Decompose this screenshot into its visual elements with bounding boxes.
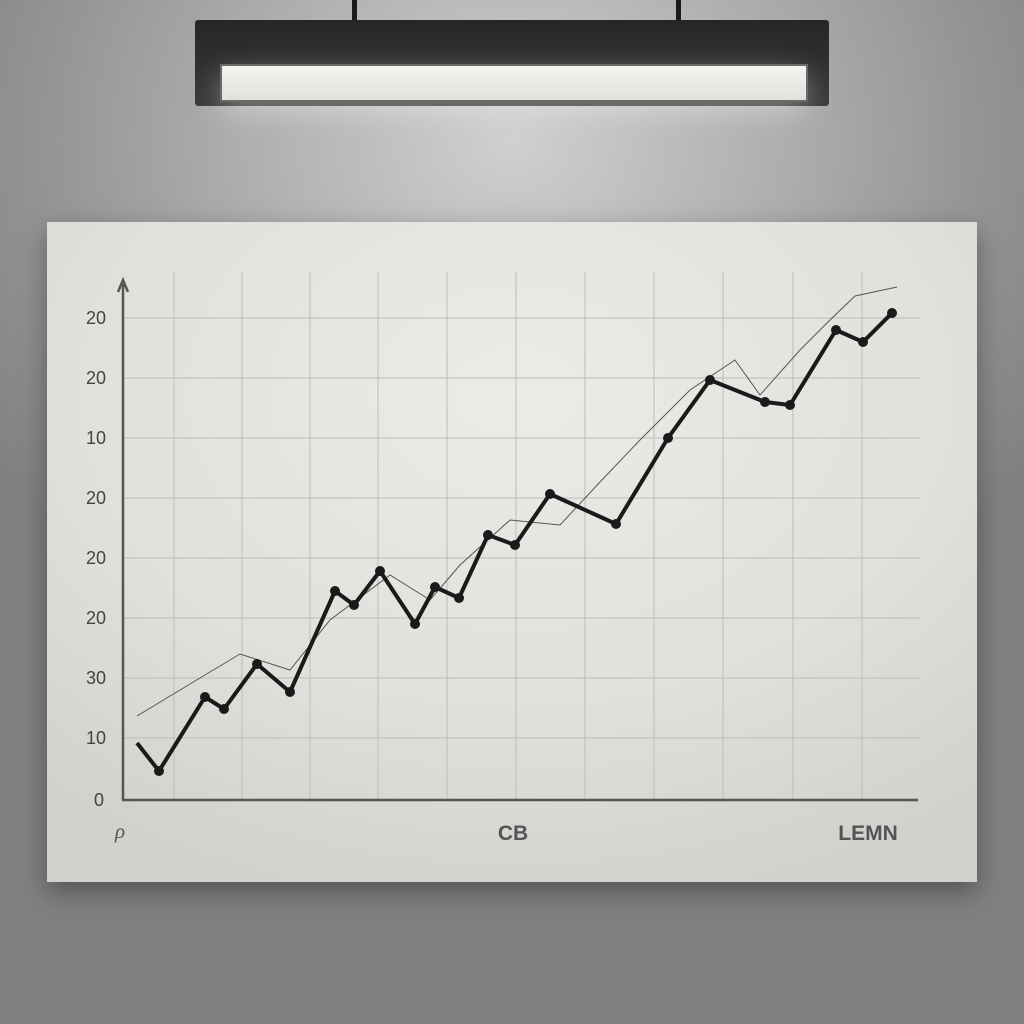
x-axis labels: ρ xyxy=(114,819,125,843)
main data line xyxy=(137,313,892,771)
y-axis labels: 20 xyxy=(86,548,106,568)
paper chart panel xyxy=(47,222,977,882)
y-axis labels: 20 xyxy=(86,488,106,508)
y-axis labels: 10 xyxy=(86,428,106,448)
lamp: ceiling light fixture xyxy=(195,0,829,118)
y-axis labels: 20 xyxy=(86,608,106,628)
x-axis labels xyxy=(114,819,898,845)
y-axis labels: 0 xyxy=(94,790,104,810)
axes xyxy=(118,280,918,800)
y-axis labels: 20 xyxy=(86,368,106,388)
thin trend line xyxy=(137,287,897,716)
y-axis labels: 10 xyxy=(86,728,106,748)
y-axis labels: 20 xyxy=(86,308,106,328)
x-axis labels: CB xyxy=(498,822,528,845)
y-axis labels xyxy=(86,308,106,810)
y-axis labels: 30 xyxy=(86,668,106,688)
x-axis labels: LEMN xyxy=(838,822,898,845)
